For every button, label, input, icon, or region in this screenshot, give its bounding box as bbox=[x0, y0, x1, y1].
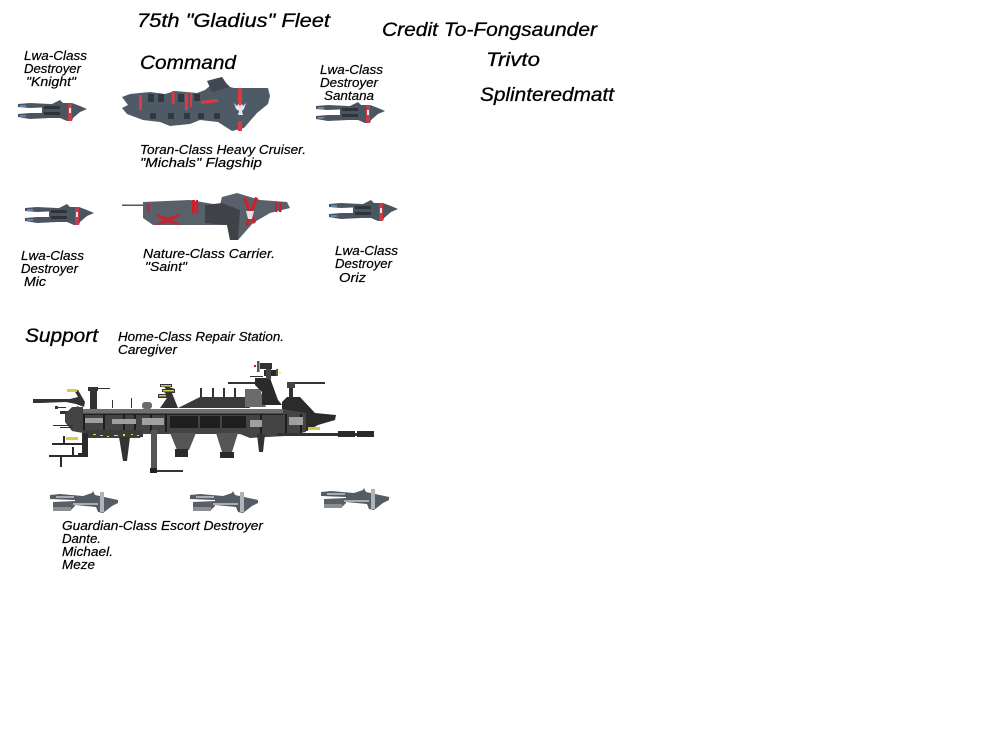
label: carrier Saint: "Saint" bbox=[145, 260, 188, 274]
ship: guardian escort Meze bbox=[321, 488, 389, 510]
label: guardian escorts: Michael. bbox=[62, 545, 113, 559]
ship: Nature-class carrier bbox=[122, 193, 290, 240]
label: destroyer Santana: Destroyer bbox=[320, 76, 379, 90]
upper deck and tower bbox=[178, 397, 250, 408]
ship: guardian escort Dante bbox=[50, 491, 118, 513]
section heading: Command: Command bbox=[140, 52, 237, 74]
ship: destroyer Mic bbox=[25, 204, 94, 225]
label: destroyer Knight: Lwa-Class bbox=[24, 49, 87, 63]
title: 75th "Gladius" Fleet bbox=[137, 10, 332, 32]
label: destroyer Santana: Lwa-Class bbox=[320, 63, 383, 77]
label: destroyer Santana: Santana bbox=[324, 89, 374, 103]
ship: destroyer Knight bbox=[18, 100, 87, 121]
label: cruiser Michals bbox=[140, 143, 306, 170]
ship: destroyer Oriz bbox=[329, 200, 398, 221]
label: destroyer Oriz: Lwa-Class bbox=[335, 244, 398, 258]
label: carrier Saint: Nature-Class Carrier. bbox=[143, 247, 275, 261]
label: cruiser Michals: Toran-Class Heavy Cruiser. bbox=[140, 143, 306, 157]
ship: Toran-class heavy cruiser bbox=[122, 77, 270, 131]
label: destroyer Knight bbox=[24, 49, 87, 89]
ship: destroyer Santana bbox=[316, 102, 385, 123]
credit heading: Credit To-Fongsaunder bbox=[382, 19, 599, 41]
label: destroyer Oriz bbox=[335, 244, 398, 285]
left weapon arm and turrets bbox=[33, 384, 178, 414]
label: destroyer Knight: "Knight" bbox=[26, 75, 77, 89]
label: destroyer Santana bbox=[320, 63, 383, 103]
nose and right turret bbox=[287, 382, 295, 388]
label: guardian escorts: Guardian-Class Escort Destroyer bbox=[62, 519, 264, 533]
label: destroyer Mic: Destroyer bbox=[21, 262, 79, 276]
main hull bbox=[65, 407, 306, 438]
label: cruiser Michals: "Michals" Flagship bbox=[140, 156, 262, 170]
credit: Trivto: Trivto bbox=[486, 49, 540, 71]
label: repair station: Home-Class Repair Station. bbox=[118, 330, 284, 344]
credit: Splinteredmatt: Splinteredmatt bbox=[480, 84, 616, 106]
label: carrier Saint bbox=[143, 247, 275, 274]
label: destroyer Mic: Lwa-Class bbox=[21, 249, 84, 263]
ship: Home-class repair station bbox=[33, 361, 374, 473]
label: repair station: Caregiver bbox=[118, 343, 178, 357]
lower left strut and antennas bbox=[49, 425, 88, 467]
label: guardian escorts: Meze bbox=[62, 558, 95, 572]
label: destroyer Mic bbox=[21, 249, 84, 289]
label: guardian escorts: Dante. bbox=[62, 532, 101, 546]
hull panels and machinery bbox=[83, 414, 302, 434]
right barrel bbox=[277, 433, 338, 436]
label: destroyer Oriz: Destroyer bbox=[335, 257, 393, 271]
label: repair station bbox=[118, 330, 284, 357]
label: destroyer Oriz: Oriz bbox=[339, 271, 367, 285]
label: destroyer Knight: Destroyer bbox=[24, 62, 82, 76]
section heading: Support: Support bbox=[25, 325, 100, 347]
label: guardian escorts bbox=[62, 519, 264, 572]
label: destroyer Mic: Mic bbox=[24, 275, 47, 289]
pylons and cones bbox=[119, 437, 130, 461]
ship: guardian escort Michael bbox=[190, 491, 258, 513]
